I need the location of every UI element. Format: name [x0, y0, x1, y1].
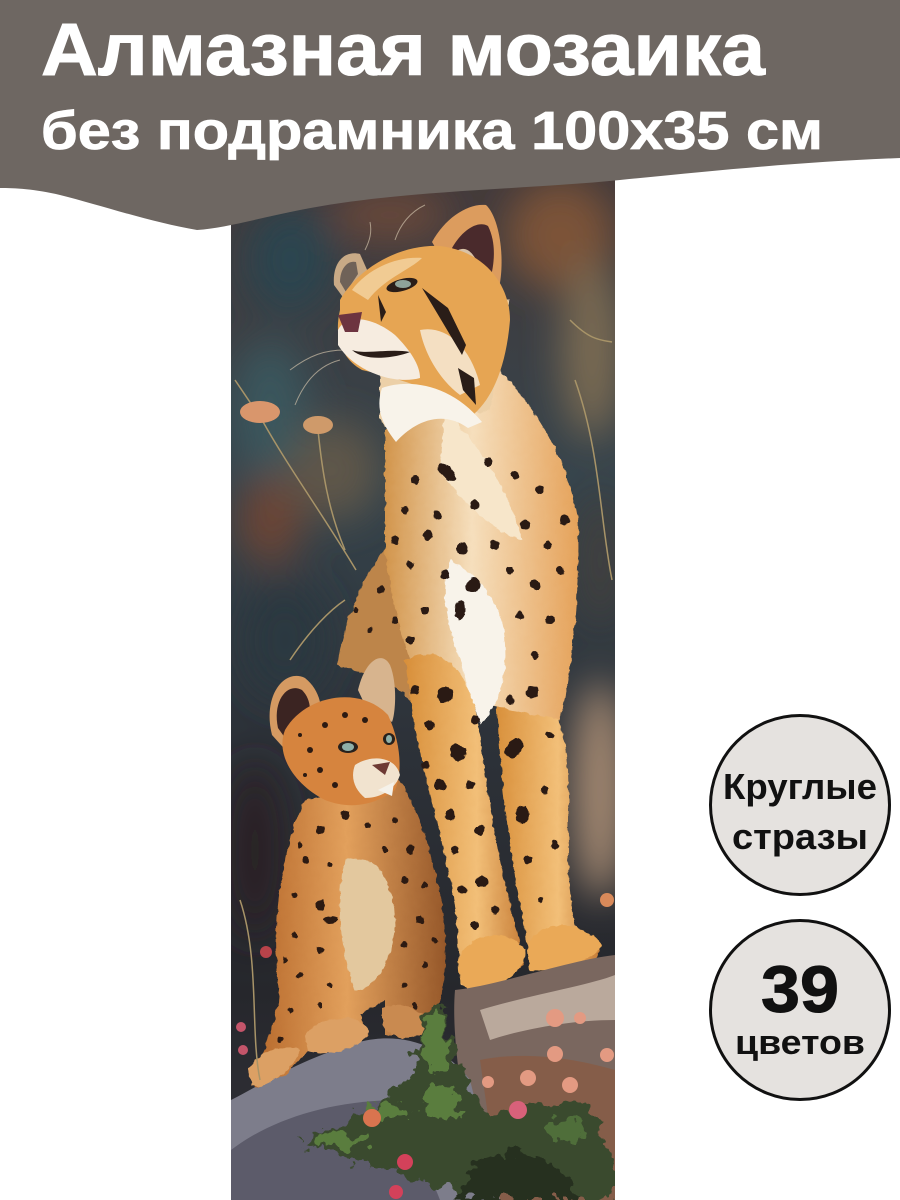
mother lynx head [334, 205, 510, 442]
face marks [352, 275, 476, 405]
torso [385, 365, 578, 720]
cheek light patch [420, 329, 480, 395]
left ear [334, 253, 368, 300]
forehead light patch [352, 258, 422, 300]
neck [380, 300, 510, 433]
spots: mother [352, 458, 570, 929]
painting: mother lynx and kitten [225, 170, 628, 1200]
head [338, 246, 510, 414]
plants and flowers [235, 320, 615, 1200]
whiskers and thin grasses at the top [290, 205, 425, 405]
kitten head [270, 658, 400, 805]
kitten spots [277, 811, 438, 1043]
nose [338, 312, 362, 332]
rear leg [495, 668, 600, 970]
haunch behind [337, 548, 410, 700]
subtitle: без подрамника 100х35 см [41, 101, 823, 161]
badge: 39 colours [710, 920, 890, 1100]
mother lynx [338, 300, 602, 990]
header banner [0, 0, 900, 230]
paws [458, 936, 525, 990]
title: Алмазная мозаика [41, 8, 766, 91]
kitten [248, 780, 446, 1088]
badge: 39 colours: цветов [735, 1024, 865, 1062]
front leg [405, 654, 525, 990]
right ear [432, 205, 502, 292]
muzzle [338, 319, 420, 380]
white ruff [379, 384, 482, 442]
badge: 39 colours: 39 [761, 952, 839, 1026]
badge: round rhinestones: Круглые [723, 766, 877, 807]
white chest [445, 560, 505, 725]
badge: round rhinestones: стразы [732, 816, 868, 857]
kitten body [248, 780, 446, 1088]
background colour blotches [225, 180, 628, 940]
badge: round rhinestones [710, 716, 890, 894]
rocks [231, 955, 615, 1200]
kitten paws [305, 1018, 368, 1054]
